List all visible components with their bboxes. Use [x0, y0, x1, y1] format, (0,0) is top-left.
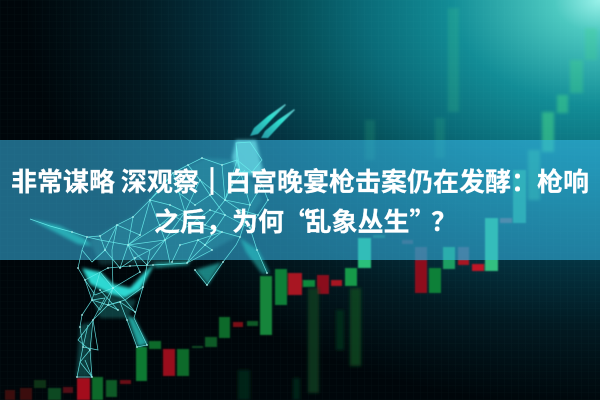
- bull horns: [250, 104, 295, 138]
- title: 之后，为何“乱象丛生”？: [154, 202, 457, 239]
- bull glow masses: [30, 140, 270, 377]
- bull wireframe: [30, 142, 268, 377]
- candlesticks: [5, 170, 526, 400]
- faded candlesticks in upper right: [365, 8, 597, 200]
- title: [11, 162, 589, 239]
- title: 非常谋略 深观察｜白宫晚宴枪击案仍在发酵：枪响: [11, 162, 589, 199]
- translucent title band: [0, 140, 600, 260]
- bull nodes: [71, 157, 269, 378]
